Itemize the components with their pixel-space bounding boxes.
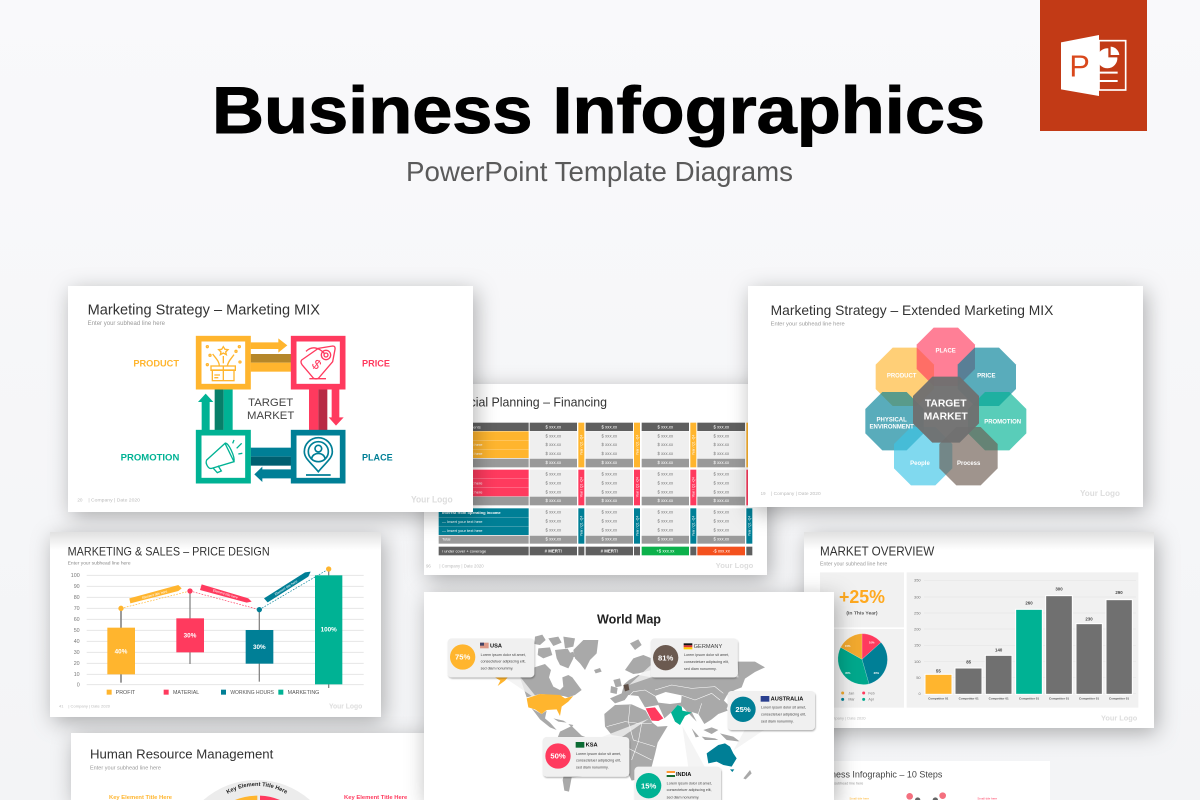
chart: competitor bars: 100 — [914, 659, 921, 664]
chart: semicircle wheel — [204, 780, 310, 800]
table: financing: $ xxx.xx — [658, 519, 674, 524]
footer: price design: Your Logo — [329, 703, 362, 710]
callout: usa: Lorem ipsum dolor sit amet, — [481, 653, 526, 657]
country: saudi arabia — [646, 707, 663, 721]
table: financing: $ xxx.xx — [714, 537, 730, 542]
chart: candlestick bars: 60 — [74, 617, 80, 623]
chart: candlestick bars: Element title here — [274, 579, 298, 596]
icon: price tag — [294, 339, 343, 387]
chart: competitor bars: 230 — [1085, 616, 1093, 621]
chart: candlestick bars: 100 — [71, 573, 80, 579]
table: financing: +$ xxx.xx — [656, 548, 675, 553]
callout: germany: Lorem ipsum dolor sit amet, — [684, 653, 729, 657]
callout: germany: sed diam nonummy. — [684, 667, 717, 671]
footer: price design: | Company | Date 2020 — [68, 703, 111, 708]
chart: candlestick bars: 40% — [115, 648, 128, 655]
chart: candlestick bars: Element title here — [212, 588, 238, 600]
table: financing: — Insert your text here — [442, 481, 483, 486]
diagram: octagon flower: ENVIRONMENT — [870, 424, 914, 430]
table: financing: Year / Q1 -Q4 — [692, 516, 696, 536]
table: financing: # MERT! — [601, 548, 619, 553]
table: financing: $ xxx.xx — [602, 451, 618, 456]
table: financing: $ xxx.xx — [658, 481, 674, 486]
table: financing: $ xxx.xx — [602, 528, 618, 533]
label: price: PRICE — [362, 358, 390, 368]
callout: india: 15% — [641, 781, 657, 790]
diagram: octagon flower: Process — [957, 461, 981, 467]
panel: growth stat: (In This Year) — [846, 610, 878, 616]
chart: competitor bars: Competitor 01 — [1019, 697, 1039, 701]
chart: candlestick bars: 0 — [77, 682, 80, 688]
table: financing: Funding requirements — [442, 424, 481, 429]
icon: PowerPoint logo: P — [1069, 50, 1090, 84]
callout: usa: USA — [490, 643, 502, 649]
table: financing: $ xxx.xx — [546, 481, 562, 486]
table: financing: $ xxx.xx — [602, 433, 618, 438]
table: financing: $ xxx.xx — [546, 424, 562, 429]
footer: market overview — [825, 713, 1138, 722]
table: financing: Year / Q1 -Q4 — [580, 435, 584, 455]
chart: competitor bars: 290 — [1115, 590, 1123, 595]
table: financing: $ xxx.xx — [546, 442, 562, 447]
table: financing — [439, 423, 752, 555]
callout: australia: Lorem ipsum dolor sit amet, — [761, 706, 806, 710]
arrows: between green and yellow — [198, 389, 233, 430]
panel: financial planning slide — [424, 384, 767, 575]
footer: financing slide: | Company | Date 2020 — [439, 563, 484, 568]
chart: competitor bars: 140 — [995, 648, 1003, 653]
table: financing: $ xxx.xx — [658, 498, 674, 503]
table: financing: — Insert your text here — [442, 451, 483, 456]
legend: MATERIAL — [173, 690, 199, 696]
chart: competitor bars: Competitor 01 — [928, 697, 949, 701]
table: financing: $ xxx.xx — [546, 510, 562, 515]
chart: competitor bars: Competitor 01 — [959, 697, 979, 701]
map: world — [495, 635, 765, 792]
arrows: between blue and green — [251, 448, 291, 482]
legend: MARKETING — [288, 690, 319, 696]
panel: price design slide — [50, 532, 381, 717]
chart: candlestick bars: 70 — [74, 606, 80, 612]
table: financing: $ xxx.xx — [714, 442, 730, 447]
subhead: Enter your subhead line here — [816, 782, 863, 786]
subhead: Enter your subhead line here — [68, 561, 131, 567]
north america — [520, 664, 582, 697]
table: financing: — Insert your text here — [442, 528, 483, 533]
chart: pie: 10% — [869, 641, 875, 645]
diagram: octagon flower: PHYSICAL — [877, 417, 907, 423]
table: financing: $ xxx.xx — [602, 460, 618, 465]
chart: competitor bars: Competitor 01 — [989, 697, 1009, 701]
table: financing: $ xxx.xx — [658, 442, 674, 447]
label: place: PLACE — [362, 452, 393, 462]
legend — [107, 690, 319, 696]
chart: pie: Mar — [848, 698, 855, 702]
diagram: octagon flower: PROMOTION — [984, 419, 1021, 425]
callout: usa: sed diam nonummy. — [481, 667, 513, 671]
footer: marketing mix: Your Logo — [411, 495, 453, 505]
table: financing: — Insert your text here — [442, 490, 483, 495]
icon: place pin — [294, 433, 343, 481]
diagram: octagon flower: PRODUCT — [887, 373, 917, 379]
table: financing: / under cover + coverage — [442, 548, 487, 553]
table: financing: $ xxx.xx — [602, 498, 618, 503]
table: financing: $ xxx.xx — [714, 451, 730, 456]
callout: australia: sed diam nonummy. — [761, 719, 794, 723]
panel: extended marketing mix slide — [748, 286, 1143, 507]
table: financing: $ xxx.xx — [602, 510, 618, 515]
callout: india — [634, 767, 721, 800]
chart: pie: 15% — [845, 644, 851, 648]
panel: growth stat — [820, 572, 904, 627]
table: financing: -$ xxx.xx — [713, 548, 731, 553]
callout: germany: consectetuer adipiscing elit, — [684, 660, 729, 664]
table: financing: $ xxx.xx — [546, 460, 562, 465]
icon: PowerPoint logo — [1040, 0, 1147, 131]
chart: competitor bars: 50 — [916, 675, 921, 680]
south america — [557, 726, 607, 792]
diagram: step markers — [849, 792, 997, 800]
table: financing: Year / Q1 -Q4 — [692, 477, 696, 498]
table: financing: Year / Q1 -Q4 — [692, 435, 696, 455]
europe and asia — [610, 662, 765, 724]
callout: ksa: sed diam nonummy. — [576, 766, 609, 770]
footer: marketing mix: | Company | Date 2020 — [88, 498, 140, 503]
country: india — [671, 705, 692, 725]
panel: growth stat: +25% — [839, 586, 885, 607]
footer: extended mix: Your Logo — [1080, 488, 1120, 498]
footer: market overview: | Company | Date 2020 — [825, 716, 866, 721]
table: financing: $ xxx.xx — [658, 433, 674, 438]
icon: product gift box — [199, 339, 248, 387]
table: financing: # MERT! — [545, 548, 563, 553]
callout: australia: AUSTRALIA — [771, 696, 803, 702]
table: financing: $ xxx.xx — [602, 442, 618, 447]
heading: marketing mix: Marketing Strategy – Marketing MIX — [88, 302, 320, 318]
panel: world map slide — [424, 592, 834, 800]
callout: ksa: consectetuer adipiscing elit, — [576, 759, 621, 763]
table: financing: $ xxx.xx — [714, 481, 730, 486]
table: financing: $ xxx.xx — [714, 510, 730, 515]
diagram: octagon flower — [865, 328, 1026, 485]
chart: competitor bars: 150 — [914, 643, 921, 648]
table: financing: $ xxx.xx — [602, 481, 618, 486]
footer: extended mix: 19 — [761, 491, 766, 496]
arrows: between red and blue — [309, 389, 344, 430]
table: financing: $ xxx.xx — [658, 528, 674, 533]
icon: price tag: $ — [309, 356, 325, 373]
chart: competitor bars: Competitor 01 — [1109, 697, 1129, 701]
table: financing: Total — [442, 537, 451, 542]
table: financing: — Insert your text here — [442, 442, 483, 447]
table: financing: $ xxx.xx — [658, 471, 674, 476]
panel: ten steps slide — [800, 761, 1050, 800]
callout: ksa: Lorem ipsum dolor sit amet, — [576, 752, 621, 756]
table: financing: $ xxx.xx — [546, 528, 562, 533]
chart: candlestick bars: Element title here — [142, 589, 168, 600]
footer: price design — [59, 703, 362, 710]
chart: competitor bars: 350 — [914, 578, 921, 583]
table: financing: $ xxx.xx — [602, 424, 618, 429]
chart: competitor bars: Competitor 01 — [1079, 697, 1099, 701]
table: financing: $ xxx.xx — [602, 489, 618, 494]
table: financing: Year / Q1 -Q4 — [748, 516, 752, 536]
callout: india: Lorem ipsum dolor sit amet, — [667, 781, 712, 785]
subhead: Enter your subhead line here — [90, 765, 161, 771]
label: product: PRODUCT — [133, 358, 180, 368]
table: financing: $ xxx.xx — [658, 510, 674, 515]
chart: pie: 30% — [874, 671, 880, 675]
legend: WORKING HOURS — [230, 690, 274, 696]
chart: candlestick bars: 40 — [74, 639, 80, 645]
callout: india: INDIA — [676, 772, 691, 778]
heading: extended mix: Marketing Strategy – Extended Marketing MIX — [771, 302, 1054, 318]
footer: marketing mix: 20 — [77, 498, 83, 503]
footer: marketing mix — [77, 495, 453, 505]
panel: human resource management slide — [61, 725, 424, 800]
chart: candlestick bars: 10 — [74, 672, 80, 678]
diagram: octagon flower: PRICE — [977, 373, 995, 379]
chart: competitor bars: 300 — [1055, 586, 1063, 591]
table: financing: $ xxx.xx — [602, 537, 618, 542]
subhead: Enter your subhead line here — [820, 561, 887, 567]
footer: price design: 41 — [59, 703, 64, 708]
table: financing: $ xxx.xx — [546, 489, 562, 494]
chart: candlestick bars — [71, 566, 364, 688]
table: financing: $ xxx.xx — [714, 489, 730, 494]
table: financing: $ xxx.xx — [658, 424, 674, 429]
callout: germany — [651, 638, 738, 677]
table: financing: $ xxx.xx — [714, 498, 730, 503]
callout: usa: 75% — [455, 653, 471, 662]
arrows: between yellow and red — [251, 338, 291, 372]
table: financing: $ xxx.xx — [602, 471, 618, 476]
diagram: octagon flower: MARKET — [924, 411, 968, 422]
table: financing: Interest from operating income — [442, 510, 501, 515]
label: promotion: PROMOTION — [121, 452, 179, 462]
chart: candlestick bars: 20 — [74, 661, 80, 667]
callout: usa: consectetuer adipiscing elit, — [481, 660, 526, 664]
footer: financing slide: 96 — [426, 563, 431, 568]
heading: human resource: Human Resource Management — [90, 748, 274, 762]
mexico and central america — [532, 708, 557, 730]
chart: candlestick bars: 90 — [74, 584, 80, 590]
chart: candlestick bars: 30% — [253, 644, 266, 651]
callout: usa — [448, 638, 534, 677]
footer: extended mix — [761, 488, 1120, 498]
table: financing: $ xxx.xx — [714, 471, 730, 476]
table: financing: $ xxx.xx — [658, 489, 674, 494]
table: financing: $ xxx.xx — [546, 537, 562, 542]
callout: australia: consectetuer adipiscing elit, — [761, 712, 806, 716]
heading: market overview: MARKET OVERVIEW — [820, 544, 934, 558]
chart: pie: Feb — [868, 691, 875, 695]
heading: financing: Financial Planning – Financing — [439, 396, 607, 410]
callout: india: sed diam nonummy. — [667, 795, 699, 799]
table: financing: $ xxx.xx — [546, 471, 562, 476]
diagram: octagon flower: PLACE — [936, 349, 956, 355]
table: financing: $ xxx.xx — [546, 498, 562, 503]
table: financing: Year / Q1 -Q4 — [580, 477, 584, 498]
chart: candlestick bars: 30 — [74, 650, 80, 656]
callout: germany: GERMANY — [694, 644, 722, 650]
chart: competitor bars: 260 — [1025, 601, 1033, 606]
country: alaska — [495, 677, 508, 686]
africa — [604, 704, 668, 781]
subhead: Enter your subhead line here — [771, 321, 845, 327]
footer: extended mix: | Company | Date 2020 — [771, 491, 821, 496]
diagram: octagon flower: TARGET — [925, 399, 967, 410]
table: financing: $ xxx.xx — [714, 519, 730, 524]
table: financing: $ xxx.xx — [714, 460, 730, 465]
chart: competitor bars: 55 — [936, 669, 941, 674]
table: financing: $ xxx.xx — [602, 519, 618, 524]
callout: ksa — [543, 737, 629, 777]
chart: candlestick bars: 80 — [74, 595, 80, 601]
chart: competitor bars: 250 — [914, 610, 921, 615]
footer: financing slide — [426, 561, 754, 570]
greenland — [573, 640, 598, 670]
table: financing: Year / Q1 -Q4 — [635, 516, 639, 536]
chart: pie: 45% — [845, 671, 851, 675]
country: tasmania — [730, 769, 734, 772]
chart: competitor bars — [907, 572, 1138, 708]
table: financing: Year / Q1 -Q4 — [635, 435, 639, 455]
callout tails — [503, 665, 765, 767]
chart: competitor bars: 200 — [914, 626, 921, 631]
chart: candlestick bars: 50 — [74, 628, 80, 634]
panel: marketing mix slide — [68, 286, 473, 512]
table: financing: $ xxx.xx — [546, 519, 562, 524]
chart: competitor bars: 300 — [914, 594, 921, 599]
country: australia — [707, 743, 737, 767]
table: financing: $ xxx.xx — [546, 433, 562, 438]
heading: price design: MARKETING & SALES – PRICE DESIGN — [68, 544, 270, 558]
title: Business Infographics — [212, 73, 985, 147]
table: financing: $ xxx.xx — [546, 451, 562, 456]
heading: ten steps: Business Infographic – 10 Steps — [813, 770, 943, 780]
icon: promotion megaphone — [199, 433, 248, 481]
table: financing: — Insert your text here — [442, 519, 483, 524]
callout: germany: 81% — [658, 653, 674, 662]
chart: competitor bars: 85 — [966, 660, 972, 665]
country: germany — [623, 684, 629, 691]
heading: world map: World Map — [597, 611, 661, 626]
callout: australia — [728, 691, 815, 730]
table: financing: $ xxx.xx — [714, 433, 730, 438]
panel: market overview slide — [804, 532, 1154, 728]
subhead: Enter your subhead line here — [88, 321, 166, 327]
footer: financing slide: Your Logo — [716, 561, 754, 570]
subtitle: PowerPoint Template Diagrams — [406, 156, 793, 187]
callout: australia: 25% — [735, 705, 751, 714]
table: financing: $ xxx.xx — [658, 460, 674, 465]
table: financing: $ xxx.xx — [714, 424, 730, 429]
chart: pie: Jan — [848, 691, 854, 695]
chart: competitor bars: Competitor 01 — [1049, 697, 1069, 701]
chart: candlestick bars: 100% — [321, 627, 337, 634]
table: financing: Year / Q1 -Q4 — [635, 477, 639, 498]
table: financing: Year / Q1 -Q4 — [580, 516, 584, 536]
chart: pie: Apr — [868, 698, 875, 702]
diagram: octagon flower: People — [910, 461, 930, 467]
footer: market overview: Your Logo — [1101, 713, 1138, 722]
callout: ksa: 50% — [550, 752, 566, 761]
table: financing: $ xxx.xx — [658, 537, 674, 542]
chart: competitor bars: 0 — [918, 691, 921, 696]
table: financing: $ xxx.xx — [658, 451, 674, 456]
legend: PROFIT — [116, 690, 136, 696]
label: target market — [247, 397, 294, 422]
country: usa — [527, 694, 573, 716]
callout: india: consectetuer adipiscing elit, — [667, 788, 712, 792]
callout: ksa: KSA — [586, 743, 598, 749]
chart: semicircle wheel: Key Element Title Here — [226, 782, 288, 794]
table: financing: $ xxx.xx — [714, 528, 730, 533]
chart: pie — [820, 629, 904, 708]
label: target market: MARKET — [247, 410, 294, 422]
label: target market: TARGET — [248, 397, 293, 409]
chart: candlestick bars: 30% — [184, 633, 197, 640]
